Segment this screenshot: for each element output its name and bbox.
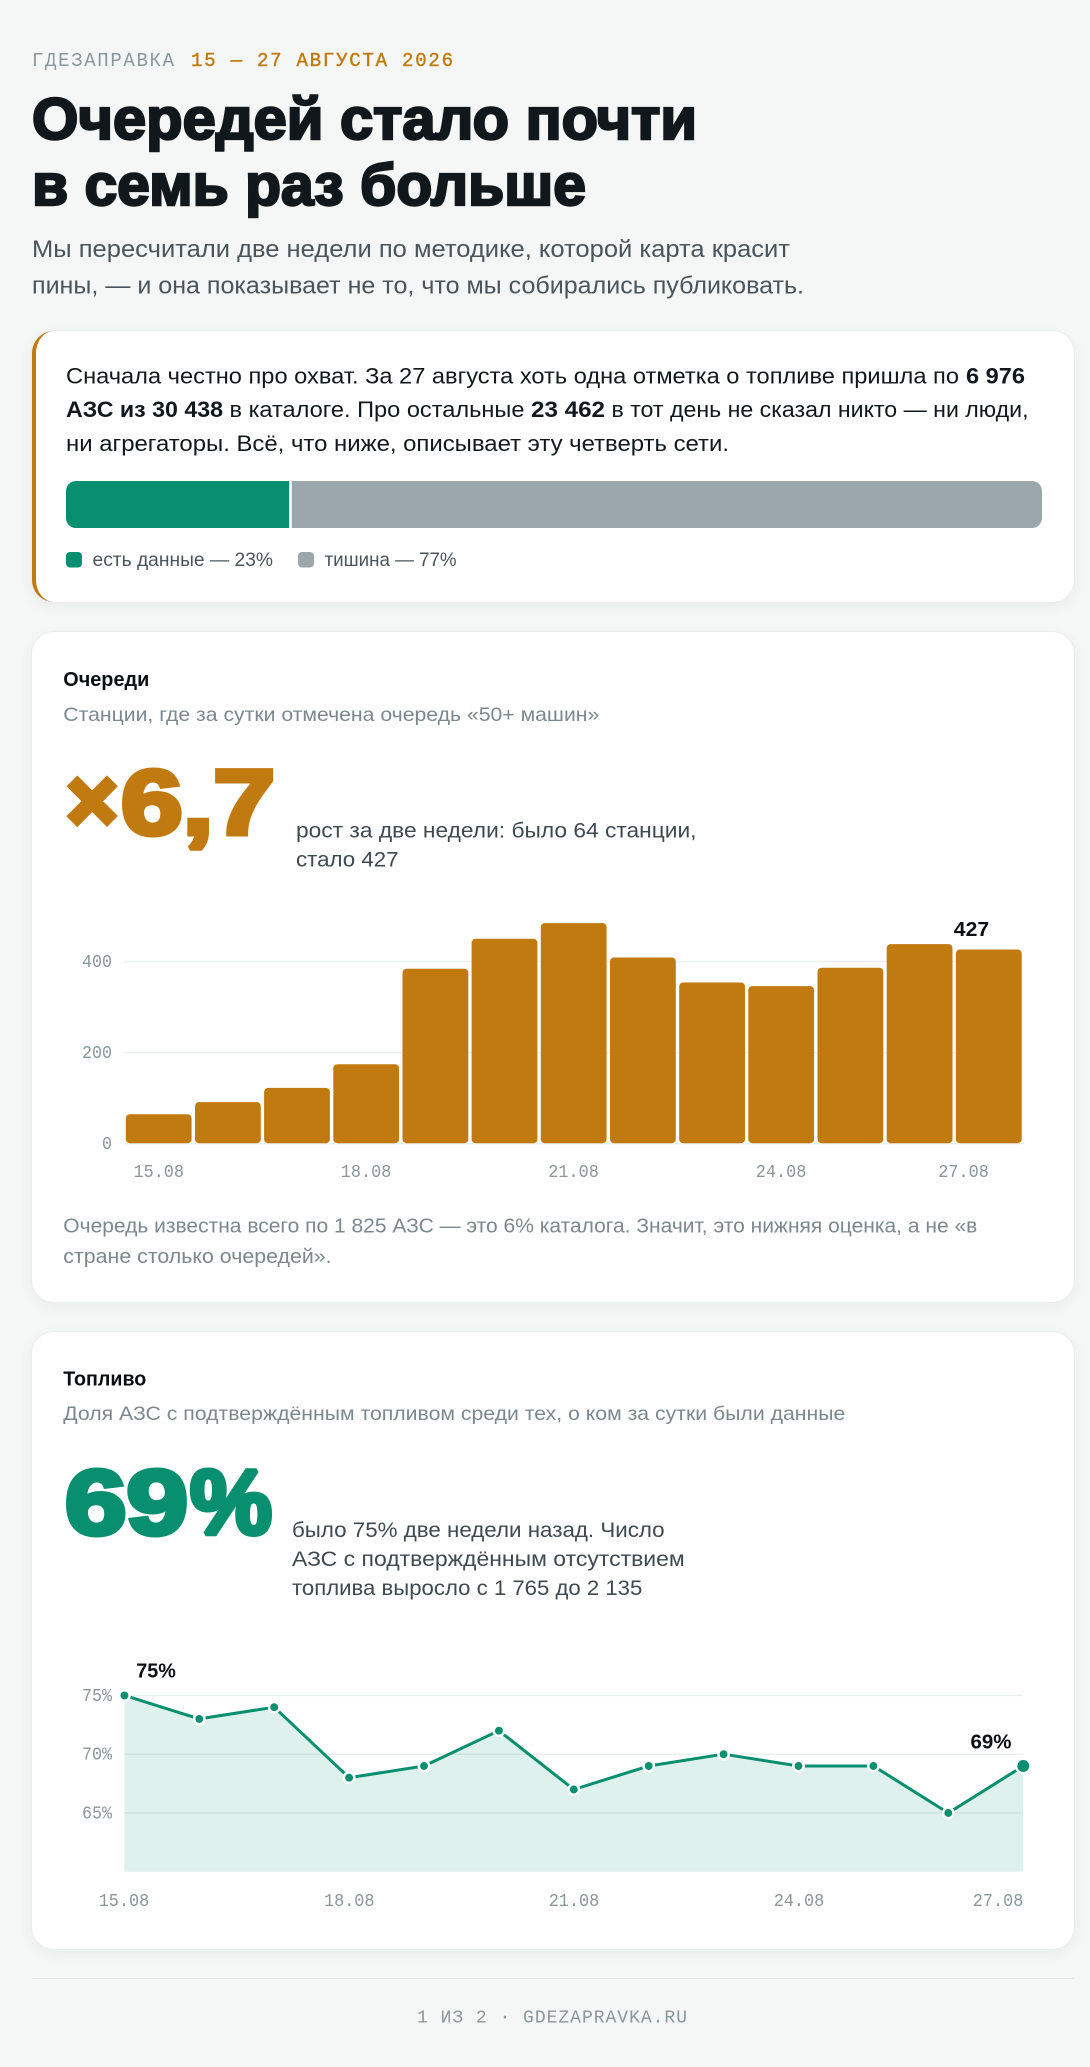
queues footnote bbox=[63, 1214, 977, 1268]
coverage bar bbox=[66, 481, 1042, 528]
footer: 1 ИЗ 2 · GDEZAPRAVKA.RU bbox=[417, 2009, 687, 2029]
line chart: 21.08 bbox=[549, 1892, 599, 1912]
queues subtitle: Станции, где за сутки отмечена очередь «50+ машин» bbox=[63, 704, 599, 726]
bar chart: 0 bbox=[102, 1135, 112, 1155]
legend: есть данные — 23% bbox=[92, 549, 273, 571]
big number: x6,7: 6,7 bbox=[121, 752, 275, 854]
growth note: рост за две недели: было 64 станции, bbox=[296, 818, 696, 842]
bar chart: 21.08 bbox=[548, 1163, 599, 1183]
line chart: 70% bbox=[82, 1746, 112, 1766]
line chart bbox=[82, 1660, 1030, 1912]
coverage text: ни агрегаторы. Всё, что ниже, описывает эту четверть сети. bbox=[66, 431, 729, 456]
subtitle: Мы пересчитали две недели по методике, которой карта красит bbox=[32, 236, 790, 263]
line chart: 65% bbox=[82, 1804, 112, 1824]
fuel heading: Топливо bbox=[63, 1368, 146, 1390]
title bbox=[32, 87, 697, 218]
title: в семь раз больше bbox=[32, 153, 586, 218]
line chart: 75% bbox=[82, 1687, 112, 1707]
fuel note: АЗС с подтверждённым отсутствием bbox=[292, 1547, 685, 1571]
coverage text: в каталоге. Про остальные bbox=[230, 397, 524, 422]
bar chart: 18.08 bbox=[341, 1163, 391, 1183]
subtitle bbox=[32, 236, 804, 300]
coverage text: 6 976 bbox=[966, 364, 1025, 388]
bar chart bbox=[82, 919, 1022, 1183]
bar chart: 200 bbox=[82, 1044, 112, 1064]
line chart: 18.08 bbox=[324, 1892, 374, 1912]
value label: 427 bbox=[954, 919, 989, 941]
queues footnote: стране столько очередей». bbox=[63, 1245, 332, 1268]
coverage text bbox=[66, 364, 1028, 456]
queues heading: Очереди bbox=[63, 669, 149, 691]
value label: start: 75% bbox=[136, 1660, 176, 1682]
coverage text: Сначала честно про охват. За 27 августа хоть одна отметка о топливе пришла по bbox=[66, 364, 959, 388]
coverage text: АЗС из 30 438 bbox=[66, 397, 223, 422]
growth note: стало 427 bbox=[296, 848, 398, 872]
fuel note bbox=[292, 1518, 685, 1600]
value label: end: 69% bbox=[970, 1731, 1012, 1753]
queues footnote: Очередь известна всего по 1 825 АЗС — это 6% каталога. Значит, это нижняя оценка, а не «в bbox=[63, 1214, 977, 1238]
panel: coverage bbox=[32, 331, 1074, 602]
line chart: 15.08 bbox=[99, 1892, 149, 1912]
panel: queues bbox=[32, 632, 1074, 1302]
big number: 69% bbox=[65, 1452, 272, 1554]
big number: 69%: 69 bbox=[65, 1452, 188, 1554]
line chart: 27.08 bbox=[973, 1892, 1023, 1912]
fuel note: было 75% две недели назад. Число bbox=[292, 1518, 665, 1542]
bar chart: 15.08 bbox=[134, 1163, 184, 1183]
growth note bbox=[296, 818, 696, 872]
big number: x6,7 bbox=[67, 752, 275, 854]
fuel note: топлива выросло с 1 765 до 2 135 bbox=[292, 1576, 642, 1600]
subtitle: пины, — и она показывает не то, что мы собирались публиковать. bbox=[32, 272, 804, 300]
coverage text: 23 462 bbox=[531, 397, 605, 422]
big number: x6,7: × bbox=[67, 753, 117, 849]
header bbox=[32, 50, 804, 300]
bar chart: 400 bbox=[82, 953, 112, 973]
eyebrow bbox=[32, 50, 453, 72]
eyebrow: ГДЕЗАПРАВКА bbox=[32, 50, 175, 72]
bar chart: 24.08 bbox=[756, 1163, 806, 1183]
panel: fuel bbox=[32, 1332, 1074, 1949]
fuel subtitle: Доля АЗС с подтверждённым топливом среди тех, о ком за сутки были данные bbox=[63, 1403, 845, 1425]
coverage text: в тот день не сказал никто — ни люди, bbox=[612, 397, 1028, 422]
big number: 69%: % bbox=[190, 1452, 272, 1554]
eyebrow: 15 — 27 АВГУСТА 2026 bbox=[191, 50, 453, 72]
bar chart: 27.08 bbox=[938, 1163, 989, 1183]
line chart: 24.08 bbox=[774, 1892, 824, 1912]
legend: тишина — 77% bbox=[325, 549, 457, 571]
legend bbox=[66, 549, 457, 571]
title: Очередей стало почти bbox=[32, 87, 697, 152]
